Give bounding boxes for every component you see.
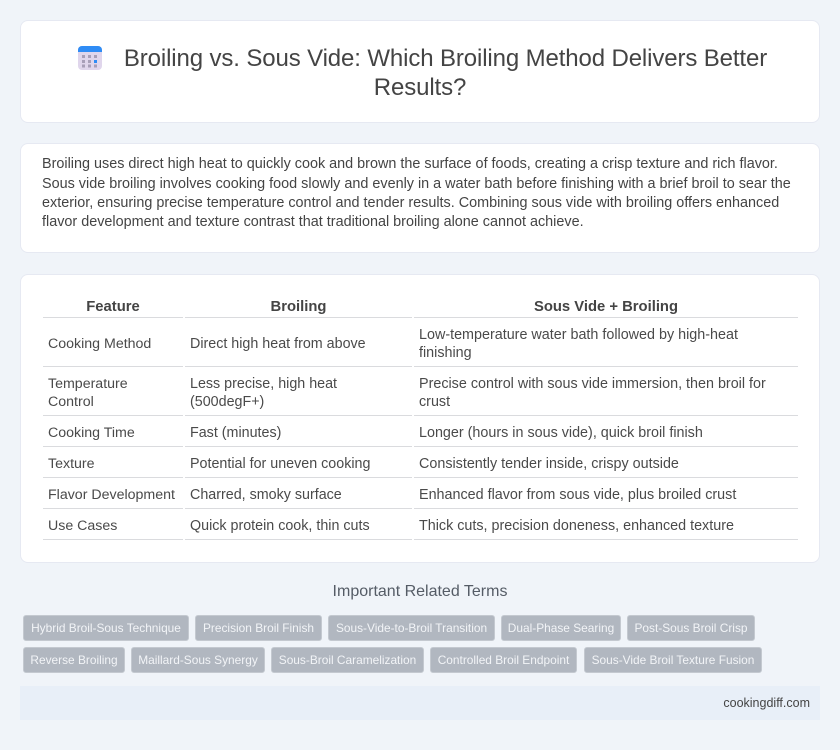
comparison table: Low-temperature water bath followed by high-heat (419, 327, 738, 343)
comparison table (43, 299, 798, 540)
comparison table: finishing (419, 345, 472, 361)
row: Cooking Time: Cooking Time (48, 425, 135, 441)
comparison table: Thick cuts, precision doneness, enhanced texture (419, 518, 734, 534)
tag (501, 615, 621, 641)
title: Broiling vs. Sous Vide: Which Broiling Method Delivers Better (124, 45, 767, 72)
tag: Controlled Broil Endpoint (438, 653, 569, 667)
comparison table: Precise control with sous vide immersion, then broil for (419, 376, 766, 392)
comparison table: Quick protein cook, thin cuts (190, 518, 370, 534)
row: Temperature Control (48, 376, 128, 410)
icon: calendar (78, 46, 102, 70)
comparison table: crust (419, 394, 450, 410)
tag: Sous-Vide-to-Broil Transition (336, 621, 487, 635)
comparison table: Fast (minutes) (190, 425, 281, 441)
tag (23, 647, 125, 673)
tag (627, 615, 755, 641)
tag: Post-Sous Broil Crisp (634, 621, 748, 635)
tag (131, 647, 265, 673)
description text: Broiling uses direct high heat to quickly cook and brown the surface of foods, creating a crisp texture and rich flavor. (42, 156, 778, 172)
header: Feature: Feature (86, 299, 140, 315)
tag: Hybrid Broil-Sous Technique (31, 621, 181, 635)
comparison table: Charred, smoky surface (190, 487, 342, 503)
comparison table: Direct high heat from above (190, 336, 366, 352)
row: Use Cases: Use Cases (48, 518, 117, 534)
description panel (20, 143, 820, 253)
related term tags (23, 615, 762, 673)
tag: Reverse Broiling (30, 653, 118, 667)
comparison table: Longer (hours in sous vide), quick broil finish (419, 425, 703, 441)
comparison table: Potential for uneven cooking (190, 456, 370, 472)
footer source: cookingdiff.com (723, 696, 810, 710)
comparison table: Consistently tender inside, crispy outside (419, 456, 679, 472)
related terms heading: Important Related Terms (333, 583, 507, 600)
tag: Sous-Vide Broil Texture Fusion (592, 653, 754, 667)
row: Temperature Control: Temperature (48, 376, 128, 392)
tag: Precision Broil Finish (203, 621, 314, 635)
tag (271, 647, 424, 673)
row: Cooking Method: Cooking Method (48, 336, 151, 352)
row: Texture: Texture (48, 456, 95, 472)
row: Flavor Development: Flavor Development (48, 487, 175, 503)
comparison table: Enhanced flavor from sous vide, plus broiled crust (419, 487, 736, 503)
description text: Sous vide broiling involves cooking food slowly and evenly in a water bath before finishing with a brief broil to sear the (42, 176, 791, 192)
header panel (20, 20, 820, 123)
description text: exterior, ensuring precise temperature control and tender results. Combining sous vide with broiling offers enhanced (42, 195, 779, 211)
tag (584, 647, 762, 673)
comparison table panel (20, 274, 820, 563)
row: Temperature Control: Control (48, 394, 94, 410)
header: Sous Vide + Broiling: Sous Vide + Broiling (534, 299, 678, 315)
tag: Maillard-Sous Synergy (138, 653, 258, 667)
comparison table: (500degF+) (190, 394, 264, 410)
title: Results? (374, 74, 466, 101)
header: Broiling: Broiling (271, 299, 326, 315)
description text (42, 156, 791, 230)
tag (430, 647, 577, 673)
title (124, 45, 767, 101)
tag (195, 615, 322, 641)
tag: Sous-Broil Caramelization (279, 653, 416, 667)
tag: Dual-Phase Searing (508, 621, 614, 635)
comparison table: Less precise, high heat (190, 376, 337, 392)
tag (328, 615, 495, 641)
tag (23, 615, 189, 641)
footer bar (20, 686, 820, 720)
description text: flavor development and texture contrast that traditional broiling alone cannot achieve. (42, 214, 584, 230)
